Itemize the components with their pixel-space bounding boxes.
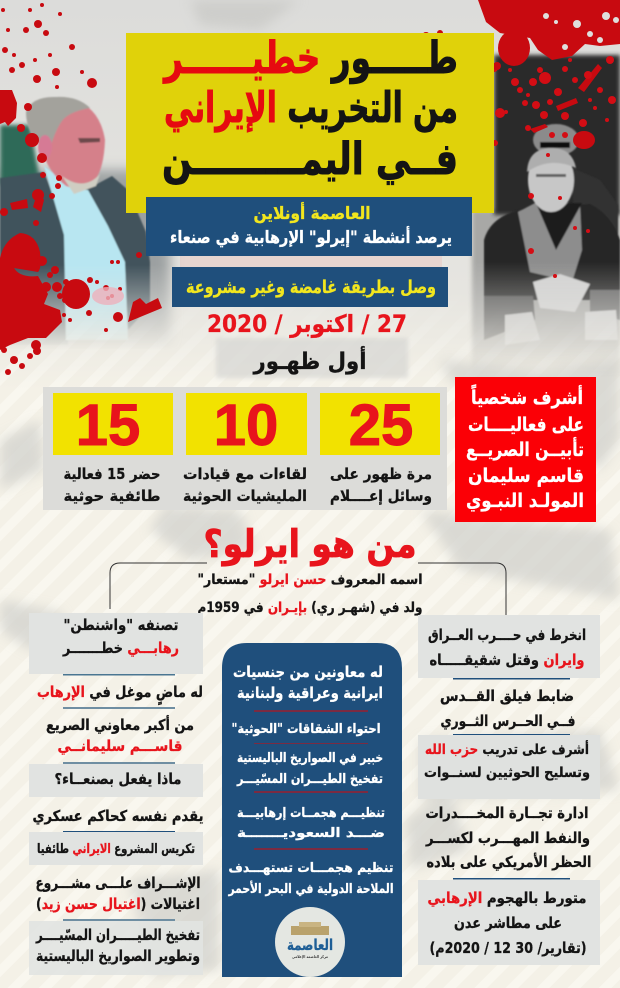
right column panel (418, 615, 600, 965)
date: 27 / اكتوبر / 2020 (207, 310, 407, 338)
heading: who is Irlu: من هو ايرلو؟ (204, 522, 416, 566)
left column panel: له ماضٍ موغل في الإرهاب (37, 683, 203, 705)
stat: 25: مرة ظهور على (330, 465, 432, 483)
first appearance label: أول ظهـور (253, 345, 366, 375)
right column panel: ادارة تجــارة المخــــدرات (426, 804, 588, 822)
blood splatter right (422, 0, 620, 278)
centre blue panel: تنظيم هجمـــات تستهـــدف (228, 861, 394, 876)
left column panel: الإشـــراف علـــى مشـــروع (36, 874, 200, 892)
centre blue panel: ايرانية وعراقية ولبنانية (237, 684, 383, 702)
stats panel (43, 387, 447, 510)
stat: 25: وسائل إعــــلام (330, 487, 432, 505)
red callout: أشرف شخصياً (471, 384, 583, 409)
arrival banner: وصل بطريقة غامضة وغير مشروعة (186, 277, 436, 298)
stat: 10: 10 (214, 393, 278, 458)
red callout: تأبيــن الصريــع (466, 437, 584, 461)
stat: 15: 15 (76, 393, 140, 458)
source banner: يرصد أنشطة "إيرلو" الإرهابية في صنعاء (170, 226, 452, 248)
centre blue panel: تنظيـــم هجمــات إرهابيـــة (237, 806, 385, 821)
left column panel: قاســـم سليمانــي (58, 737, 182, 755)
title line 3: فــي اليمـــــــــن (162, 134, 458, 185)
photo: man on the left (0, 97, 170, 360)
stat: 10: المليشيات الحوثية (183, 487, 307, 505)
title line 2: من التخريب الإيراني (164, 83, 458, 133)
right column panel: الحظر الأمريكي على بلاده (426, 853, 592, 871)
centre blue panel: احتواء الشقاقات "الحوثية" (232, 722, 380, 737)
source banner: العاصمة أونلاين (254, 202, 370, 224)
red callout: على فعاليــــات (468, 414, 584, 436)
left column panel: تصنفه "واشنطن" (64, 616, 178, 634)
left column panel: يقدم نفسه كحاكم عسكري (32, 807, 204, 826)
stat: 10: لقاءات مع قيادات (183, 465, 307, 483)
right column panel: والنفط المهـــرب لكســـر (425, 829, 590, 847)
photo: man on the right (greyscale) (472, 55, 620, 380)
right column panel: وايران وقتل شقيقـــــاه (430, 651, 584, 669)
title line 1: طـــــور خطيــــــر (163, 33, 458, 84)
centre blue panel: الملاحة الدولية في البحر الأحمر (228, 880, 394, 897)
left column panel: من أكبر معاوني الصريع (46, 715, 194, 734)
stat: 15: طائفية حوثية (64, 487, 160, 505)
stat: 15 (53, 393, 173, 505)
right column panel: (تقارير/ 30 12 / 2020م) (430, 939, 586, 957)
centre blue panel: خبير في الصواريخ الباليستية (237, 751, 383, 766)
source banner (146, 197, 472, 256)
centre blue panel: ضـــد السعوديـــــــة (237, 826, 385, 841)
right column panel: فــي الحــرس الثــوري (440, 712, 576, 731)
bracket with identity text: ولد في (شهـر ري) بإيـران في 1959م (198, 600, 422, 617)
red callout (455, 377, 596, 522)
centre blue panel: له معاونين من جنسيات (233, 663, 383, 681)
stat: 25 (320, 393, 440, 505)
stat: 25: 25 (349, 393, 413, 458)
centre blue panel: تفخيخ الطيـــران المسّيـــر (236, 772, 383, 787)
right column panel: أشرف على تدريب حزب الله (425, 740, 589, 758)
right column panel: وتسليح الحوثيين لسنــوات (424, 765, 590, 781)
left column panel: تكريس المشروع الايراني طائفيا (37, 842, 195, 857)
left column panel: ماذا يفعل بصنعــاء؟ (54, 770, 182, 788)
left column panel: وتطوير الصواريخ الباليستية (36, 947, 200, 965)
right column panel: على مطاشر عدن (454, 914, 562, 932)
centre blue panel (222, 643, 402, 977)
left column panel: اغتيالات (اغتيال حسن زيد) (36, 895, 200, 913)
right column panel: متورط بالهجوم الإرهابي (428, 889, 586, 907)
bracket with identity text (110, 563, 506, 617)
bracket with identity text: اسمه المعروف حسن ايرلو "مستعار" (198, 572, 422, 588)
left column panel: رهابـــي خطـــــــر (62, 639, 179, 657)
red callout: المولـد النبـوي (466, 490, 584, 513)
stat: 15: حضر 15 فعالية (64, 465, 161, 483)
logo badge: مركز العاصمة الإعلامي (292, 954, 328, 960)
right column panel: ضابط فيلق القــدس (440, 687, 574, 705)
title panel (126, 33, 494, 213)
left column panel (29, 613, 204, 975)
logo badge (275, 907, 345, 977)
left column panel: تفخيخ الطيـــــران المسّيــــر (35, 926, 200, 944)
red callout: قاسم سليمان (468, 465, 584, 487)
stat: 10 (183, 393, 307, 505)
arrival banner (172, 267, 448, 307)
blood splatter left (0, 3, 162, 375)
logo badge: العاصمة (287, 936, 333, 954)
